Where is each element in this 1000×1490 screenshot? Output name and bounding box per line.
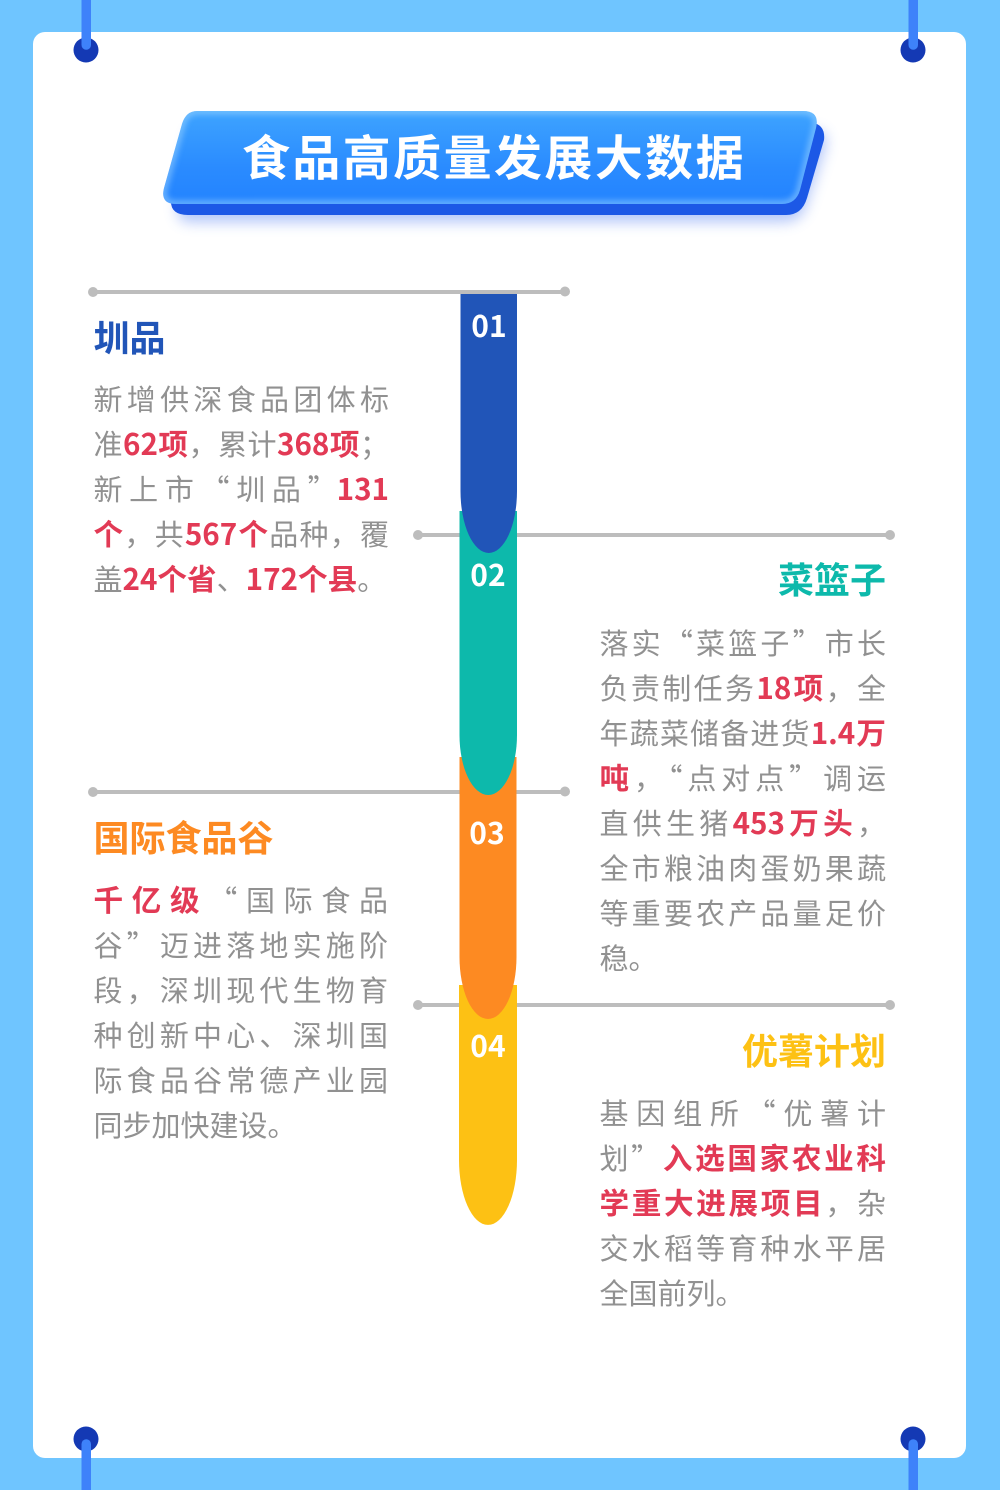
text block: 国际食品谷 xyxy=(94,877,388,1145)
text block: 圳品: 新上市“圳品”131 xyxy=(94,466,389,509)
text block: 菜篮子: 落实“菜篮子”市长 xyxy=(600,621,886,663)
heading: 国际食品谷: 国际食品谷 xyxy=(94,810,274,862)
number 02: 02 xyxy=(470,551,506,595)
text block: 菜篮子: 全市粮油肉蛋奶果蔬 xyxy=(600,846,886,888)
text block: 国际食品谷: 际食品谷常德产业园 xyxy=(94,1058,388,1100)
text block: 菜篮子: 等重要农产品量足价 xyxy=(600,891,886,933)
heading: 圳品: 圳品 xyxy=(94,310,166,362)
text block: 菜篮子: 直供生猪453万头， xyxy=(600,800,886,843)
text block: 圳品: 准62项，累计368项； xyxy=(94,421,389,464)
text block: 圳品: 盖24个省、172个县。 xyxy=(94,556,386,599)
text block: 菜篮子 xyxy=(600,621,886,978)
text block: 国际食品谷: 种创新中心、深圳国 xyxy=(94,1013,388,1055)
number 04: 04 xyxy=(470,1022,506,1066)
text block: 国际食品谷: 同步加快建设。 xyxy=(94,1103,297,1145)
text block: 圳品 xyxy=(94,377,389,599)
text block: 菜篮子: 年蔬菜储备进货1.4万 xyxy=(600,710,886,753)
text block: 国际食品谷: 段，深圳现代生物育 xyxy=(94,968,388,1010)
text block: 优薯计划 xyxy=(600,1091,886,1313)
text block: 优薯计划: 学重大进展项目，杂 xyxy=(600,1180,886,1223)
text block: 国际食品谷: 千亿级“国际食品 xyxy=(94,877,388,920)
heading: 优薯计划: 优薯计划 xyxy=(742,1023,886,1075)
text block: 优薯计划: 基因组所“优薯计 xyxy=(600,1091,886,1133)
text block: 菜篮子: 稳。 xyxy=(600,936,658,978)
number 03: 03 xyxy=(469,809,505,853)
text block: 圳品: 个，共567个品种，覆 xyxy=(94,511,389,554)
number 01: 01 xyxy=(471,302,507,346)
text block: 优薯计划: 划”入选国家农业科 xyxy=(600,1135,886,1178)
title: 食品高质量发展大数据 xyxy=(242,119,746,189)
text block: 优薯计划: 交水稻等育种水平居 xyxy=(600,1226,886,1268)
text block: 菜篮子: 负责制任务18项，全 xyxy=(600,665,886,708)
title banner shape xyxy=(163,111,833,230)
text block: 菜篮子: 吨，“点对点”调运 xyxy=(600,755,886,798)
text block: 圳品: 新增供深食品团体标 xyxy=(94,377,389,419)
text block: 优薯计划: 全国前列。 xyxy=(600,1271,745,1313)
text block: 国际食品谷: 谷”迈进落地实施阶 xyxy=(94,923,388,965)
heading: 菜篮子: 菜篮子 xyxy=(778,552,886,604)
